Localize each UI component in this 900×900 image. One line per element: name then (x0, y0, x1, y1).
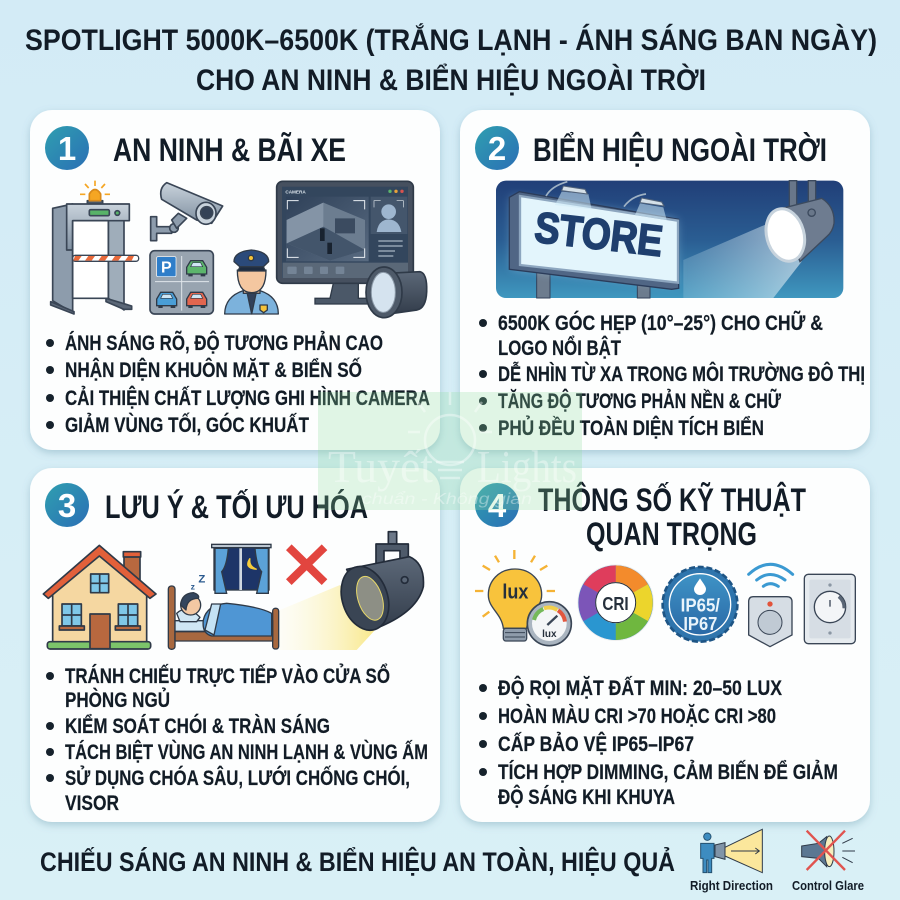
bullet list 2: PHỦ ĐỀU TOÀN DIỆN TÍCH BIỂN (498, 416, 764, 440)
bullet list 2: 6500K GÓC HẸP (10°–25°) CHO CHỮ & (498, 311, 823, 335)
icon: spotlight (366, 267, 427, 318)
heading: an ninh & bãi xe: AN NINH & BÃI XE (113, 132, 346, 168)
bullet list 4: CẤP BẢO VỆ IP65–IP67 (498, 732, 694, 756)
bullet list 3: TÁCH BIỆT VÙNG AN NINH LẠNH & VÙNG ẤM (65, 740, 428, 764)
bullet list 1: GIẢM VÙNG TỐI, GÓC KHUẤT (65, 413, 309, 437)
icon: ip65/ip67 badge: IP65/ (681, 595, 720, 616)
badge 2 (475, 126, 519, 170)
icon: monitor (277, 181, 413, 304)
heading: thông số kỹ thuật quan trọng (538, 482, 806, 552)
sign lamps (546, 182, 667, 220)
panel: lưu ý & tối ưu hóa (30, 468, 440, 822)
label: right direction: Right Direction (690, 878, 773, 893)
icon: lux bulb and meter: lux (502, 580, 529, 603)
icon: police officer (225, 250, 278, 314)
icon: cri colour wheel: CRI (602, 593, 629, 614)
bullet list 1: NHẬN DIỆN KHUÔN MẶT & BIỂN SỐ (65, 358, 362, 382)
store billboard illustration (496, 181, 843, 298)
icon: house (43, 545, 156, 649)
watermark: chuẩn - Không gian (362, 490, 532, 508)
beam (683, 223, 802, 298)
bullet list 2: LOGO NỔI BẬT (498, 336, 621, 360)
bullet list 4 (479, 676, 838, 809)
bullet list 3: KIỂM SOÁT CHÓI & TRÀN SÁNG (65, 714, 330, 738)
watermark: Lights (477, 441, 577, 492)
icon: parking grid: P (161, 260, 172, 277)
badge 3 (45, 483, 89, 527)
bullet list 1 (46, 331, 430, 437)
bullet list 2: TĂNG ĐỘ TƯƠNG PHẢN NỀN & CHỮ (498, 389, 781, 413)
spotlight (760, 181, 834, 266)
security illustration (51, 181, 427, 318)
icon: sleeping person in bed (168, 586, 279, 649)
sign posts (537, 270, 650, 298)
title: CHO AN NINH & BIỂN HIỆU NGOÀI TRỜI (196, 63, 706, 97)
watermark: Tuyết (328, 441, 433, 492)
bedroom glare illustration (43, 532, 423, 650)
bullet list 4: ĐỘ RỌI MẶT ĐẤT MIN: 20–50 LUX (498, 676, 782, 700)
icon: ip65/ip67 badge: IP67 (683, 613, 717, 634)
icon: lux bulb and meter: lux (542, 629, 557, 640)
heading: biển hiệu ngoài trời: BIỂN HIỆU NGOÀI TRỜI (533, 132, 827, 168)
footer slogan: CHIẾU SÁNG AN NINH & BIỂN HIỆU AN TOÀN, HIỆU QUẢ (40, 845, 675, 877)
panel: biển hiệu ngoài trời (460, 110, 870, 450)
bullet list 3 (46, 664, 428, 815)
specification icons (475, 550, 855, 647)
title (25, 23, 877, 97)
badge 1 (45, 126, 89, 170)
icon: glare spotlight (333, 532, 423, 636)
bullet list 4: TÍCH HỢP DIMMING, CẢM BIẾN ĐỂ GIẢM (498, 761, 838, 784)
icon: ip65/ip67 badge (663, 567, 737, 642)
bullet list 3: TRÁNH CHIẾU TRỰC TIẾP VÀO CỬA SỔ (65, 664, 390, 688)
icon: security gate (51, 189, 132, 314)
icon: motion sensor (749, 564, 793, 647)
panel: thông số kỹ thuật (460, 468, 870, 822)
badge 2: 2 (488, 130, 506, 167)
badge 4 (475, 483, 519, 527)
billboard: STORE (532, 204, 665, 266)
heading: lưu ý & tối ưu hóa: LƯU Ý & TỐI ƯU HÓA (105, 489, 368, 525)
light beam (280, 585, 375, 650)
watermark (318, 392, 582, 510)
badge 1: 1 (58, 130, 76, 167)
badge 3: 3 (58, 487, 76, 524)
bullet list 3: PHÒNG NGỦ (65, 688, 170, 712)
bullet list 4: ĐỘ SÁNG KHI KHUYA (498, 785, 675, 809)
heading: thông số kỹ thuật quan trọng: THÔNG SỐ KỸ THUẬT (538, 482, 806, 518)
icon: right direction (701, 829, 762, 873)
bullet list 1: ÁNH SÁNG RÕ, ĐỘ TƯƠNG PHẢN CAO (65, 331, 383, 355)
bullet list 4: HOÀN MÀU CRI >70 HOẶC CRI >80 (498, 705, 776, 728)
icon: monitor: CAMERA (285, 189, 306, 194)
icon: cctv camera (151, 183, 223, 241)
heading: thông số kỹ thuật quan trọng: QUAN TRỌNG (586, 516, 757, 552)
bullet list 3: VISOR (65, 792, 119, 815)
icon: parking grid (150, 251, 213, 314)
bedroom glare illustration: z (191, 581, 196, 591)
bullet list 2 (479, 311, 865, 440)
badge 4: 4 (488, 487, 507, 524)
bedroom glare illustration: Z (198, 574, 205, 586)
icon: dimmer switch (804, 574, 855, 644)
bullet list 1: CẢI THIỆN CHẤT LƯỢNG GHI HÌNH CAMERA (65, 386, 430, 410)
icon: control glare (802, 831, 855, 870)
billboard (509, 192, 679, 289)
icon: lux bulb and meter (475, 550, 571, 646)
label: control glare: Control Glare (792, 878, 864, 893)
icon: night window (212, 544, 271, 593)
bullet list 3: SỬ DỤNG CHÓA SÂU, LƯỚI CHỐNG CHÓI, (65, 766, 410, 790)
panel: an ninh & bãi xe (30, 110, 440, 450)
icon: red cross (292, 550, 322, 579)
icon: cri colour wheel (577, 564, 654, 641)
